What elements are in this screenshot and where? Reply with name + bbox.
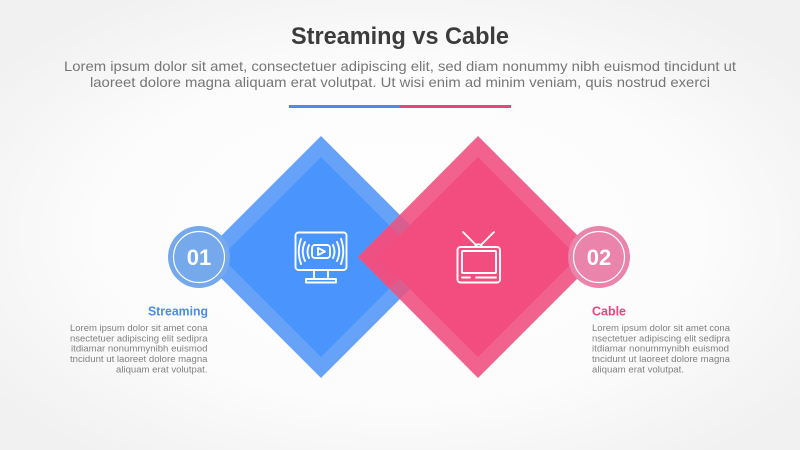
streaming description: aliquam erat volutpat.	[116, 364, 208, 374]
cable description	[592, 323, 730, 374]
intro text: laoreet dolore magna aliquam erat volutpat. Ut wisi enim ad minim veniam, quis nostrud exerci	[90, 74, 710, 90]
streaming description: tncidunt ut laoreet dolore magna	[70, 354, 208, 364]
cable description: aliquam erat volutpat.	[592, 364, 684, 374]
icon: monitor with streaming video	[296, 232, 346, 282]
icon: retro television	[458, 232, 500, 282]
cable heading: Cable	[592, 304, 626, 318]
streaming heading: Streaming	[148, 304, 208, 318]
streaming description: nsectetuer adipiscing elit sedipra	[70, 334, 208, 344]
number badge 02: 02	[587, 245, 611, 270]
intro text	[64, 58, 736, 90]
label: streaming	[70, 304, 208, 374]
label: cable	[592, 304, 730, 374]
pink diamond: cable	[358, 136, 599, 378]
cable description: nsectetuer adipiscing elit sedipra	[592, 334, 730, 344]
cable description: Lorem ipsum dolor sit amet cona	[592, 323, 730, 333]
streaming description: itdiamar nonummynibh euismod	[71, 344, 208, 354]
cable description: itdiamar nonummynibh euismod	[592, 344, 729, 354]
title: Streaming vs Cable	[291, 23, 509, 50]
cable description: tncidunt ut laoreet dolore magna	[592, 354, 730, 364]
intro text: Lorem ipsum dolor sit amet, consectetuer adipiscing elit, sed diam nonummy nibh euismod tincidunt ut	[64, 58, 736, 74]
streaming description: Lorem ipsum dolor sit amet cona	[70, 323, 208, 333]
number badge 01: 01	[187, 245, 211, 270]
number badge 02	[568, 226, 630, 288]
title underline: two-colour divider	[289, 105, 511, 108]
blue diamond: streaming	[200, 136, 442, 378]
streaming description	[70, 323, 208, 374]
number badge 01	[168, 226, 230, 288]
